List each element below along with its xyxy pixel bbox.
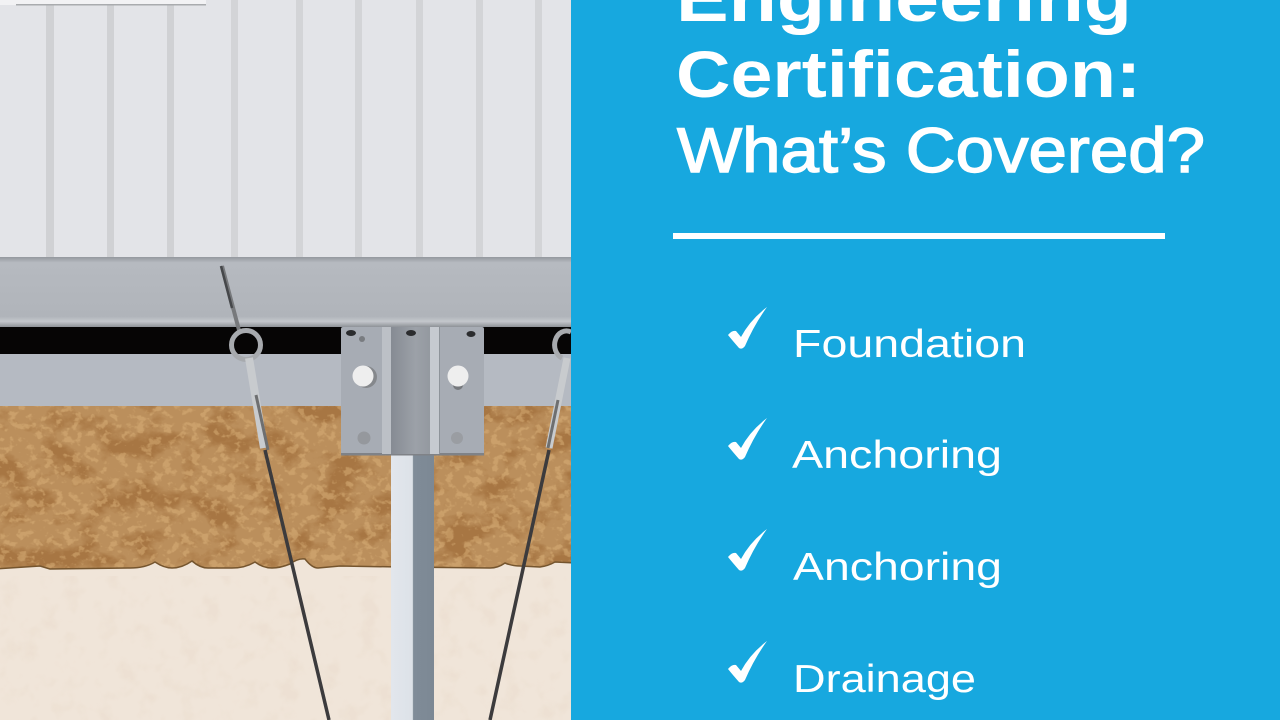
item: Anchoring xyxy=(728,418,1002,477)
item: Drainage xyxy=(728,641,976,701)
right anchor strap and cable xyxy=(490,331,571,720)
divider xyxy=(673,233,1165,239)
title xyxy=(676,0,1205,186)
left anchor strap and cable xyxy=(221,266,329,720)
steel post xyxy=(391,455,434,720)
dark gap xyxy=(0,327,571,354)
wall siding xyxy=(0,0,571,260)
illustration: skirting and foundation xyxy=(0,0,576,720)
item: Anchoring: Anchoring xyxy=(793,546,1002,589)
item: Foundation xyxy=(728,307,1026,366)
lower rail xyxy=(0,354,571,406)
title: Certification: xyxy=(676,37,1141,111)
mounting bracket xyxy=(341,327,484,456)
item: Drainage: Drainage xyxy=(793,658,976,701)
panel: what's covered xyxy=(571,0,1280,720)
steel beam xyxy=(0,257,571,327)
sand layer xyxy=(0,559,576,720)
item: Foundation: Foundation xyxy=(793,323,1026,366)
title: What’s Covered? xyxy=(677,116,1205,186)
soil layer xyxy=(0,406,571,576)
checklist xyxy=(728,307,1026,701)
item: Anchoring: Anchoring xyxy=(792,434,1002,477)
item: Anchoring xyxy=(728,529,1002,589)
